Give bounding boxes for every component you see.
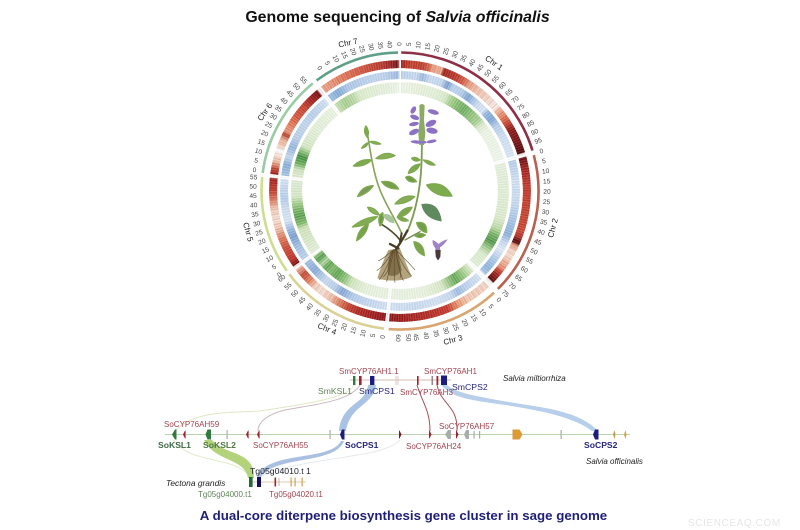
tick labels: 20	[340, 322, 349, 332]
tick labels: 5	[487, 303, 495, 311]
tick labels: 15	[424, 42, 433, 51]
chromosome names: Chr 5	[241, 221, 255, 243]
gene labels: SoCPS2	[584, 440, 618, 450]
gene labels: SmCYP76AH1	[424, 367, 477, 376]
tick labels: 25	[255, 229, 264, 238]
tick labels: 50	[483, 68, 494, 79]
chromosome names: Chr 6	[256, 101, 275, 123]
gene labels: Tg05g04010.t 1	[250, 466, 311, 476]
tick labels: 40	[305, 302, 315, 312]
Salvia miltiorrhiza track	[350, 376, 451, 385]
tick labels: 20	[433, 44, 442, 53]
gene labels: SmCYP76AH1.1	[339, 367, 399, 376]
tick labels: 40	[536, 228, 546, 237]
tick labels: 15	[339, 50, 349, 60]
tick labels	[249, 40, 551, 342]
tick labels: 30	[366, 43, 375, 52]
tick labels: 25	[543, 199, 551, 206]
gene labels: SoCYP76AH24	[406, 442, 462, 451]
tick labels: 35	[313, 308, 323, 318]
tick labels: 15	[350, 326, 359, 335]
tick labels: 60	[277, 274, 287, 284]
tick labels: 15	[543, 178, 551, 186]
tick labels: 50	[529, 247, 539, 257]
tick labels: 60	[519, 265, 529, 275]
tick labels: 0	[276, 271, 283, 279]
gene labels: SoCYP76AH57	[439, 422, 495, 431]
tick labels: 60	[498, 81, 508, 91]
tick labels: 20	[260, 129, 270, 139]
chromosome names: Chr 3	[442, 333, 464, 347]
gene labels: SoKSL2	[203, 440, 236, 450]
gene labels: SmKSL1	[318, 386, 352, 396]
tick labels: 20	[543, 189, 551, 196]
tick labels: 40	[250, 202, 258, 210]
tick labels: 30	[441, 326, 450, 336]
tick labels: 85	[526, 119, 536, 129]
tick labels: 25	[331, 318, 340, 328]
watermark: SCIENCEAQ.COM	[688, 518, 781, 529]
tick labels: 45	[476, 63, 486, 73]
tick labels: 5	[406, 42, 413, 46]
tick labels: 75	[500, 289, 510, 299]
roots	[377, 248, 415, 283]
tick labels: 0	[315, 65, 323, 72]
tick labels: 70	[507, 281, 517, 292]
single flower	[433, 239, 448, 260]
tick labels: 10	[542, 168, 550, 176]
gene labels: Salvia officinalis	[586, 457, 643, 466]
tick labels: 50	[290, 289, 300, 299]
tick labels: 30	[322, 313, 332, 323]
tick labels: 35	[459, 54, 469, 64]
tick labels: 75	[516, 103, 526, 113]
tick labels: 70	[510, 95, 521, 105]
tick labels: 10	[359, 329, 368, 338]
tick labels: 5	[271, 263, 278, 271]
blue heatmap ring	[280, 71, 520, 311]
tick labels: 55	[283, 281, 294, 292]
tick labels: 10	[415, 41, 423, 49]
gene labels: SoCPS1	[345, 440, 379, 450]
red gene density ring	[269, 60, 531, 322]
tick labels: 45	[249, 193, 257, 200]
tick labels: 10	[265, 254, 275, 264]
chromosome names: Chr 4	[316, 321, 338, 337]
chromosome names	[241, 36, 560, 347]
gene labels: SoCYP76AH55	[253, 441, 309, 450]
stems	[367, 105, 422, 249]
tick labels: 0	[252, 167, 257, 174]
tick labels: 15	[469, 313, 479, 324]
gene labels: SmCYP76AH3	[400, 388, 453, 397]
tick labels: 60	[394, 334, 401, 342]
gene labels: SmCPS2	[452, 382, 488, 392]
tick labels: 20	[258, 238, 267, 247]
tick labels: 40	[468, 58, 478, 68]
tick labels: 0	[539, 148, 545, 156]
tick labels: 35	[273, 104, 283, 114]
connecting ribbons	[174, 385, 598, 478]
tick labels: 50	[249, 184, 257, 191]
tick labels: 0	[396, 42, 404, 46]
gene labels: Tg05g04020.t1	[269, 490, 323, 499]
gene labels: Tectona grandis	[166, 478, 226, 488]
tick labels: 30	[252, 220, 262, 229]
gene labels	[158, 367, 643, 499]
tick labels: 55	[250, 174, 258, 182]
tick labels: 30	[451, 50, 460, 60]
gene cluster synteny diagram	[158, 367, 643, 499]
tick labels: 50	[404, 334, 411, 342]
tick labels: 20	[460, 318, 469, 328]
tick labels: 30	[268, 112, 278, 122]
chromosome arcs	[260, 51, 540, 331]
sage plant illustration	[352, 104, 453, 283]
tick labels: 10	[477, 308, 487, 318]
tick labels: 25	[264, 121, 274, 130]
tick labels: 35	[251, 211, 260, 219]
tick labels: 45	[284, 89, 295, 99]
tick labels: 55	[491, 74, 501, 85]
tick labels: 30	[541, 209, 550, 217]
tick labels: 95	[534, 137, 543, 146]
title: Genome sequencing of Salvia officinalis	[245, 9, 550, 26]
tick labels: 25	[442, 47, 451, 56]
gene labels: Tg05g04000.t1	[198, 490, 252, 499]
tick labels: 40	[278, 96, 289, 107]
tick labels: 45	[533, 238, 543, 247]
flower spike	[408, 104, 439, 145]
tick labels: 10	[331, 54, 340, 64]
leaves	[352, 126, 452, 256]
gene labels: SoCYP76AH59	[164, 420, 220, 429]
Salvia officinalis track	[165, 430, 630, 440]
tick labels: 90	[530, 128, 540, 137]
tick labels: 35	[376, 41, 384, 50]
tick labels: 35	[539, 219, 548, 227]
tick labels: 50	[291, 82, 301, 92]
tick labels: 15	[256, 138, 266, 148]
gene labels: SmCPS1	[359, 386, 395, 396]
tick labels: 65	[513, 273, 523, 284]
tick labels: 5	[323, 60, 331, 67]
tick labels: 40	[421, 332, 430, 340]
tick labels: 45	[412, 333, 419, 342]
gene labels: SoKSL1	[158, 440, 191, 450]
gene labels: Salvia miltiorrhiza	[503, 374, 566, 383]
chromosome names: Chr 1	[483, 54, 505, 73]
circular genome plot	[241, 36, 560, 347]
tick labels: 25	[450, 323, 460, 332]
tick labels: 5	[542, 158, 547, 165]
tick labels: 0	[495, 297, 502, 304]
tick labels: 10	[254, 148, 263, 156]
tick labels: 55	[298, 75, 308, 86]
green heatmap ring	[291, 82, 509, 300]
tick labels: 40	[385, 40, 393, 49]
tick labels: 65	[504, 88, 515, 98]
tick labels: 20	[348, 47, 357, 57]
tick labels: 55	[524, 256, 534, 266]
tick labels: 45	[297, 296, 308, 306]
bottom caption: A dual-core diterpene biosynthesis gene cluster in sage genome	[200, 508, 607, 523]
Tectona grandis track	[249, 477, 306, 487]
chromosome names: Chr 2	[546, 217, 560, 239]
tick labels: 15	[261, 246, 271, 256]
tick labels: 0	[380, 335, 387, 339]
tick labels: 5	[370, 333, 377, 338]
tick labels: 35	[431, 329, 440, 338]
chromosome names: Chr 7	[337, 36, 359, 49]
tick labels: 5	[254, 157, 259, 165]
tick labels: 80	[521, 111, 531, 121]
tick labels: 25	[357, 45, 366, 54]
